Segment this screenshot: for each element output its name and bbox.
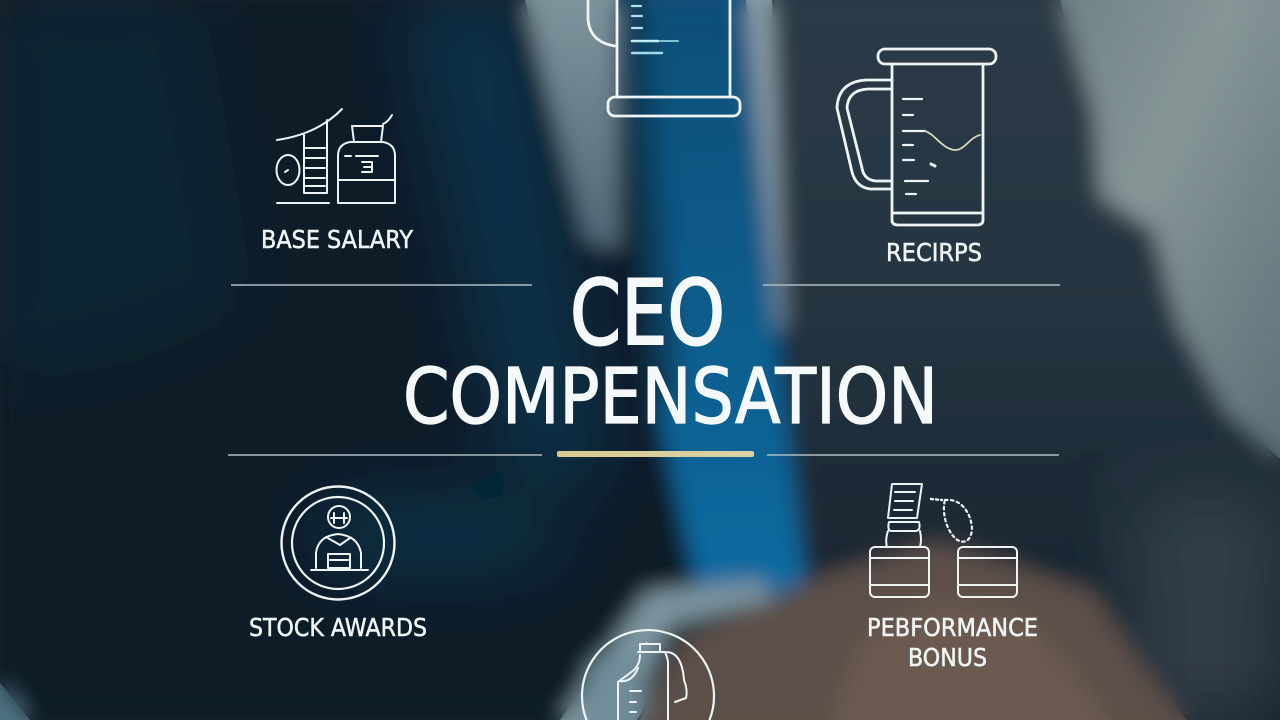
icon: receipts mug <box>837 49 996 225</box>
label: performance bonus <box>867 613 1038 672</box>
divider: top left <box>231 284 532 286</box>
icon: bottom bottle in circle (cropped) <box>582 630 714 720</box>
icon: base salary <box>276 109 395 203</box>
label: performance bonus: BONUS <box>908 643 987 672</box>
icon: performance bonus <box>870 484 1017 597</box>
divider: bottom left <box>228 454 542 456</box>
divider: top right <box>763 284 1060 286</box>
gold accent bar <box>557 451 754 457</box>
label: receipts: RECIRPS <box>886 238 982 267</box>
title: COMPENSATION <box>403 353 938 442</box>
label: base salary: BASE SALARY <box>261 225 414 254</box>
icon: stock awards <box>282 486 394 600</box>
label: performance bonus: PEBFORMANCE <box>867 613 1038 642</box>
title <box>403 261 938 442</box>
icon: top measuring mug (cropped) <box>588 0 740 116</box>
title: CEO <box>570 261 725 366</box>
label: stock awards: STOCK AWARDS <box>249 613 427 642</box>
divider: bottom right <box>767 454 1059 456</box>
